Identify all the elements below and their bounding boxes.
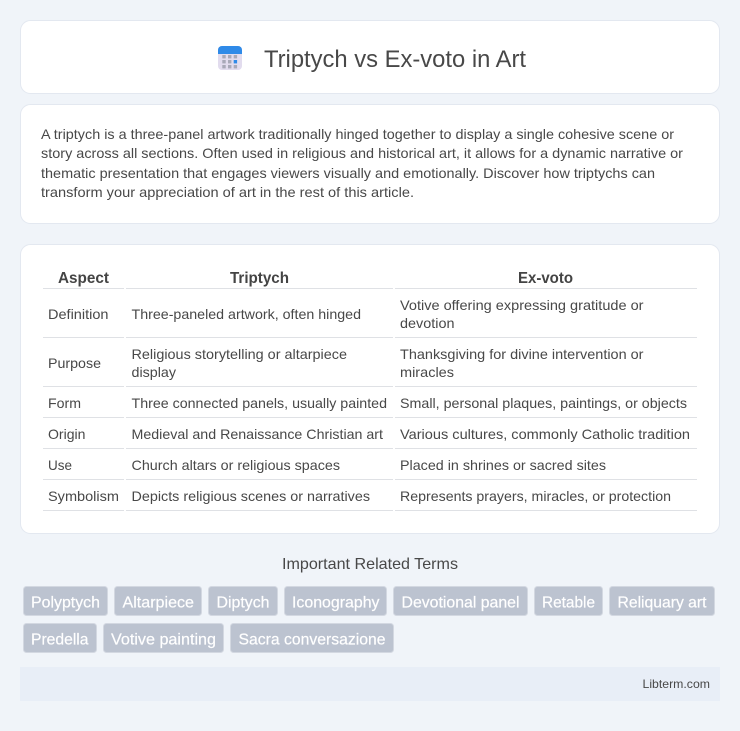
tag: Votive painting	[104, 624, 224, 652]
row: origin: Medieval and Renaissance Christian art	[132, 426, 383, 442]
row: purpose: display	[132, 364, 176, 380]
tag: Iconography: Iconography	[292, 594, 380, 612]
row: symbolism	[48, 488, 671, 504]
intro text	[41, 126, 683, 200]
row: form: Three connected panels, usually painted	[132, 395, 387, 411]
tag: Sacra conversazione	[230, 624, 394, 652]
panel: title header	[20, 20, 720, 94]
tag: Predella	[24, 624, 96, 652]
tag: Retable	[534, 586, 602, 616]
row: use	[48, 457, 606, 473]
row: definition: Definition	[48, 306, 108, 322]
related term tags	[24, 586, 714, 652]
footer: Libterm.com	[642, 677, 710, 691]
intro text: A triptych is a three-panel artwork traditionally hinged together to display a single cohesive scene or	[41, 126, 674, 142]
table header	[58, 270, 573, 287]
tag: Sacra conversazione: Sacra conversazione	[238, 632, 386, 648]
icon: calendar	[218, 46, 242, 70]
tag: Devotional panel: Devotional panel	[402, 594, 520, 612]
row: symbolism: Represents prayers, miracles, or protection	[400, 488, 671, 504]
row: form	[48, 395, 687, 411]
row: use: Placed in shrines or sacred sites	[400, 457, 606, 473]
panel: introduction	[20, 104, 720, 224]
tag: Iconography	[284, 586, 386, 616]
table header: Aspect	[58, 270, 110, 287]
row: origin	[48, 426, 690, 442]
tag: Diptych: Diptych	[216, 594, 270, 612]
row: symbolism: Symbolism	[48, 488, 119, 504]
row: purpose: Purpose	[48, 355, 101, 371]
row: origin: Various cultures, commonly Catholic tradition	[400, 426, 690, 442]
tag: Polyptych	[24, 586, 108, 616]
row: purpose: miracles	[400, 364, 454, 380]
row: purpose: Religious storytelling or altarpiece	[132, 346, 347, 362]
heading: important related terms: Important Related Terms	[282, 556, 458, 573]
panel: comparison table	[20, 244, 720, 534]
row: purpose: Thanksgiving for divine intervention or	[400, 346, 644, 362]
row: symbolism: Depicts religious scenes or narratives	[132, 488, 370, 504]
title: Triptych vs Ex-voto in Art	[264, 46, 526, 73]
row: form: Form	[48, 395, 81, 411]
table header: Triptych	[230, 270, 289, 287]
footer	[20, 667, 720, 701]
tag: Retable: Retable	[542, 594, 595, 612]
row: use: Use	[48, 457, 72, 473]
tag: Polyptych: Polyptych	[31, 594, 100, 612]
row: use: Church altars or religious spaces	[132, 457, 340, 473]
row: definition: devotion	[400, 315, 454, 331]
row: definition: Three-paneled artwork, often hinged	[132, 306, 361, 322]
row: origin: Origin	[48, 426, 86, 442]
tag: Devotional panel	[394, 586, 528, 616]
tag: Diptych	[208, 586, 278, 616]
row: purpose	[48, 346, 644, 380]
row: form: Small, personal plaques, paintings, or objects	[400, 395, 687, 411]
tag: Reliquary art: Reliquary art	[618, 594, 707, 612]
intro text: thematic presentation that engages viewers visually and emotionally. Discover how triptychs can	[41, 165, 655, 181]
row: definition	[48, 297, 644, 331]
row: definition: Votive offering expressing gratitude or	[400, 297, 644, 313]
tag: Votive painting: Votive painting	[111, 632, 216, 648]
tag: Reliquary art	[610, 586, 714, 616]
table header: Ex-voto	[518, 270, 573, 287]
intro text: transform your appreciation of art in the rest of this article.	[41, 184, 414, 200]
intro text: story across all sections. Often used in religious and historical art, it allows for a dynamic narrative or	[41, 145, 683, 161]
tag: Altarpiece: Altarpiece	[122, 594, 194, 612]
tag: Altarpiece	[114, 586, 202, 616]
tag: Predella: Predella	[31, 632, 89, 648]
